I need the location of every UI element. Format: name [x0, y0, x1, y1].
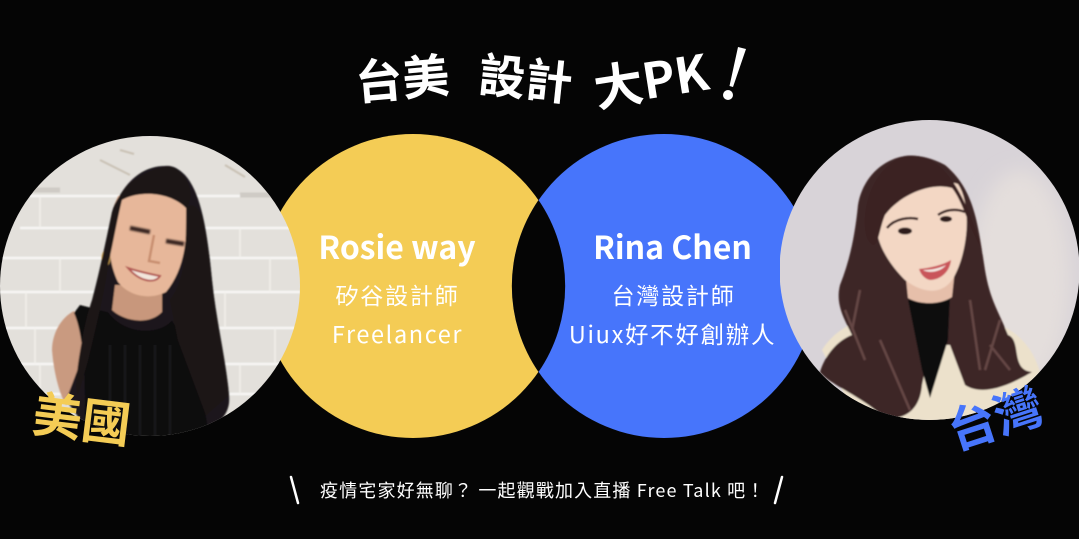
role: Uiux好不好創辦人: Uiux好不好創辦人: [569, 316, 776, 350]
title: 大PK: 大PK: [588, 34, 714, 122]
hair back: [820, 156, 1032, 418]
title: [352, 34, 746, 122]
photo: Rosie way: [0, 136, 300, 440]
ribbed top lines: [110, 345, 170, 435]
footer text: 疫情宅家好無聊？ 一起觀戰加入直播 Free Talk 吧！: [320, 477, 765, 503]
shoulder: [52, 311, 82, 405]
neck: [112, 285, 162, 320]
label: 美國: 美國: [29, 375, 135, 458]
role: Freelancer: Freelancer: [332, 316, 463, 350]
left slash: [291, 477, 298, 503]
role: 矽谷設計師: 矽谷設計師: [336, 277, 460, 311]
title: 台美: 台美: [352, 37, 452, 114]
title: 設計: 設計: [476, 36, 576, 115]
exclamation dot: [723, 90, 733, 100]
side hair over face: [876, 154, 968, 238]
blazer: [822, 325, 1040, 420]
face: [877, 182, 967, 291]
name: Rosie way: Rosie way: [318, 223, 476, 269]
lips: [919, 260, 951, 280]
black overlap lens: [512, 200, 565, 372]
black top: [74, 305, 210, 440]
hair front: [76, 190, 186, 376]
photo: Rina Chen: [780, 120, 1079, 425]
face: [109, 192, 186, 296]
black turtleneck: [908, 296, 950, 398]
neck: [905, 276, 956, 304]
yellow circle: [261, 134, 565, 438]
earring: [102, 250, 110, 266]
right slash: [775, 477, 782, 503]
label: 台灣: 台灣: [938, 367, 1051, 463]
blue circle: [512, 134, 816, 438]
role: 台灣設計師: 台灣設計師: [612, 277, 736, 311]
hair back: [66, 166, 229, 425]
title: exclamation mark: [730, 47, 746, 87]
name: Rina Chen: Rina Chen: [593, 223, 752, 269]
